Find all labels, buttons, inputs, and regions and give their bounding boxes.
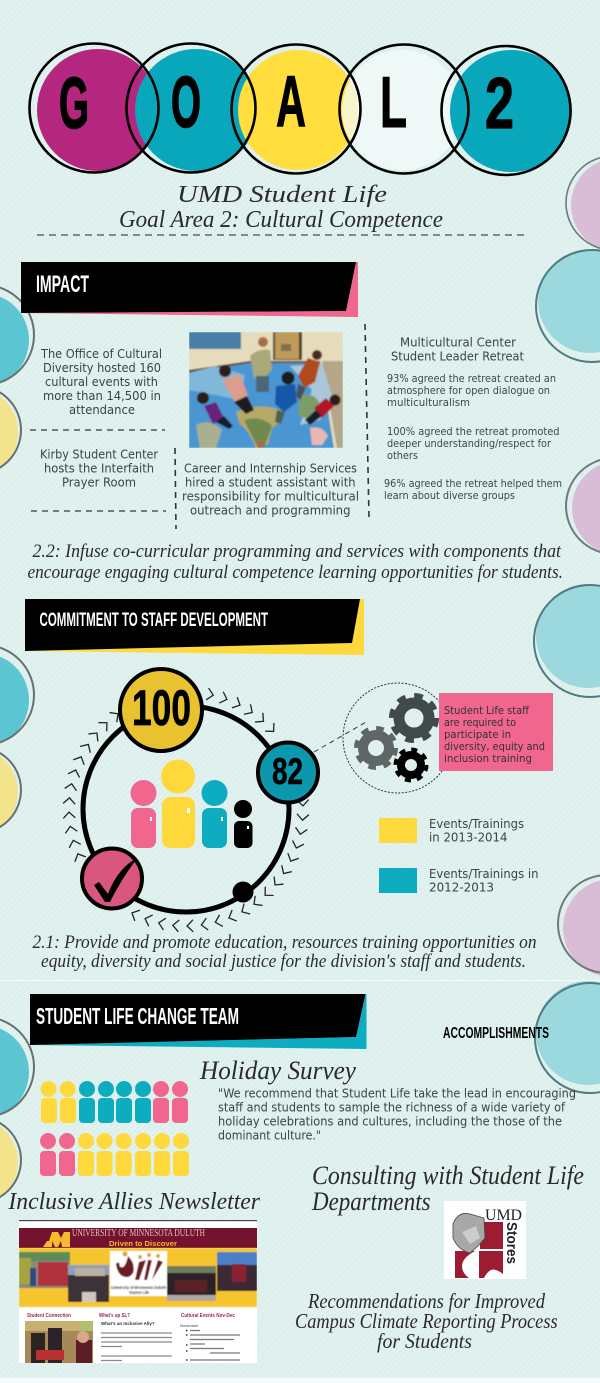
black dot <box>232 882 254 902</box>
chart: people pictogram <box>40 1081 189 1176</box>
newsletter columns: What's an Inclusive Ally? <box>101 1321 155 1326</box>
text: recommendations <box>295 1289 558 1353</box>
retreat stat 93%: multiculturalism <box>387 396 470 409</box>
text: Kirby Student Center: Kirby Student Center <box>40 446 159 462</box>
text: student leader retreat <box>384 334 562 502</box>
legend item 2012-2013: Events/Trainings in <box>429 866 538 881</box>
retreat heading <box>391 334 524 364</box>
icon: small gear <box>396 750 426 780</box>
retreat stat 93% <box>387 372 556 409</box>
panel: impact heading: IMPACT <box>36 271 89 298</box>
subtitle: Goal Area 2: Cultural Competence <box>119 207 443 233</box>
badge: 100: 100 <box>132 680 191 736</box>
panel: student life change team heading <box>30 994 366 1049</box>
text: cultural diversity events <box>40 346 162 417</box>
text: holiday survey quote: holiday celebrations and cultures, including the those of the <box>218 1114 562 1128</box>
text: Kirby Student Center: Prayer Room <box>62 474 136 490</box>
text: cultural diversity events: cultural events with <box>45 374 158 389</box>
retreat stat 93%: atmosphere for open dialogue on <box>387 384 550 397</box>
text: career and internship services: Career and Internship Services <box>184 460 357 476</box>
letter A: A <box>276 62 306 142</box>
text: recommendations: for Students <box>377 1329 472 1353</box>
people icons <box>130 760 252 848</box>
decorative side circles <box>0 156 600 1206</box>
heading: consulting with departments: Consulting with Student Life <box>312 1161 584 1190</box>
text: recommendations: Campus Climate Reporting Process <box>295 1309 558 1333</box>
text: objective 2.1 <box>32 932 536 972</box>
text: career and internship services: responsibility for multicultural <box>182 488 359 504</box>
text: objective 2.1: 2.1: Provide and promote education, resources training opportunities on <box>32 932 536 953</box>
legend item 2013-2014: Events/Trainings <box>429 816 524 831</box>
subtitle <box>119 182 443 233</box>
newsletter header: Driven to Discover <box>109 1241 177 1248</box>
photo: students standing on world map <box>189 332 343 448</box>
panel: commitment to staff development heading: COMMITMENT TO STAFF DEVELOPMENT <box>40 610 268 631</box>
newsletter columns: November <box>180 1323 199 1328</box>
text: cultural diversity events: attendance <box>69 402 135 417</box>
callout box: Student Life staff <box>444 704 529 717</box>
text: cultural diversity events: The Office of Cultural <box>40 346 162 361</box>
retreat stat 93%: 93% agreed the retreat created an <box>387 372 556 385</box>
retreat stat 100%: others <box>387 449 418 462</box>
image: newsletter preview <box>19 1220 257 1363</box>
pictogram row two <box>40 1133 189 1176</box>
text: career and internship services <box>182 460 359 518</box>
newsletter photo band: Student Life <box>129 1290 149 1295</box>
panel: commitment to staff development heading <box>25 599 364 655</box>
panel: student life change team heading: STUDENT LIFE CHANGE TEAM <box>36 1003 239 1029</box>
text: objective 2.2 <box>28 541 563 583</box>
logo: UMD Stores: UMD <box>485 1207 522 1224</box>
legend item 2012-2013: 2012-2013 <box>429 880 494 894</box>
newsletter header <box>19 1228 257 1248</box>
retreat stat 100%: 100% agreed the retreat promoted <box>387 425 560 438</box>
legend item 2012-2013 <box>379 866 538 894</box>
legend item 2013-2014 <box>379 816 524 844</box>
person: orange shirt <box>296 350 322 400</box>
circle fills <box>37 49 572 172</box>
badge: 82 <box>258 742 318 802</box>
text: cultural diversity events: more than 14,500 in <box>43 388 161 403</box>
letter L: L <box>380 63 407 143</box>
newsletter header: UNIVERSITY OF MINNESOTA DULUTH <box>72 1228 205 1239</box>
person: blue shirt <box>275 372 297 424</box>
subtitle: UMD Student Life <box>177 182 387 208</box>
retreat stat 100%: deeper understanding/respect for <box>387 437 551 450</box>
person: red shirt <box>305 394 340 425</box>
pictogram row one <box>41 1081 188 1123</box>
newsletter columns: Cultural Events Nov-Dec <box>181 1313 235 1319</box>
legend item 2013-2014: in 2013-2014 <box>429 830 508 844</box>
text: objective 2.2: 2.2: Infuse co-curricular programming and services with components that <box>32 541 562 562</box>
legend <box>379 816 538 894</box>
badge: check mark <box>82 848 142 908</box>
text: holiday survey quote: staff and students to sample the richness of a wide variety of <box>218 1100 566 1114</box>
panel: impact heading <box>21 262 358 317</box>
text: career and internship services: hired a student assistant with <box>185 474 356 490</box>
heading: holiday survey: Holiday Survey <box>199 1056 356 1085</box>
person: standing man <box>250 337 272 392</box>
text: Kirby Student Center: hosts the Interfaith <box>44 460 154 476</box>
title: GOAL 2 circles <box>30 44 572 175</box>
heading: consulting with departments: Departments <box>311 1187 430 1216</box>
retreat stat 96%: 96% agreed the retreat helped them <box>384 477 562 490</box>
logo: UMD Stores: Stores <box>503 1222 520 1264</box>
text: holiday survey quote <box>218 1086 576 1142</box>
callout box: diversity, equity and <box>444 740 545 753</box>
text: objective 2.2: encourage engaging cultural competence learning opportunities for students. <box>28 562 563 583</box>
retreat stat 100% <box>387 425 560 462</box>
text: career and internship services: outreach and programming <box>190 502 350 518</box>
icon: large gear <box>392 696 436 740</box>
newsletter columns: What's up SL? <box>99 1313 131 1319</box>
newsletter photo band <box>19 1248 257 1307</box>
icon: medium gear <box>357 729 395 767</box>
callout box: participate in <box>444 728 511 741</box>
text: holiday survey quote: dominant culture." <box>218 1128 321 1142</box>
badge: 82: 82 <box>272 751 303 792</box>
callout: gears and diversity training <box>314 683 553 793</box>
callout box: are required to <box>444 716 516 729</box>
callout box: inclusion training <box>444 752 532 765</box>
chart: staff development ring <box>63 669 318 932</box>
newsletter columns: Student Connection <box>27 1313 71 1319</box>
retreat heading: Student Leader Retreat <box>391 348 524 364</box>
retreat stat 96% <box>384 477 562 502</box>
heading: inclusive allies newsletter: Inclusive Allies Newsletter <box>7 1189 261 1215</box>
circle outlines <box>30 44 570 175</box>
person: striped shirt <box>219 365 254 414</box>
letter G: G <box>59 64 89 144</box>
person: purple shirt <box>197 392 233 429</box>
letter O: O <box>171 63 201 143</box>
retreat heading: Multicultural Center <box>400 334 517 350</box>
callout box <box>439 693 553 771</box>
heading: consulting with departments <box>311 1161 584 1216</box>
text: cultural diversity events: Diversity hosted 160 <box>43 360 161 375</box>
text: Kirby Student Center <box>40 446 159 490</box>
text: objective 2.1: equity, diversity and social justice for the division's staff and students. <box>41 951 526 972</box>
number 2: 2 <box>485 64 514 144</box>
chevron arrows around ring <box>63 688 309 932</box>
logo: UMD Stores <box>444 1201 526 1279</box>
text: recommendations: Recommendations for Improved <box>307 1289 545 1313</box>
newsletter columns <box>25 1313 240 1363</box>
retreat stat 96%: learn about diverse groups <box>384 489 515 502</box>
newsletter photo band: University of Minnesota Duluth <box>111 1285 166 1290</box>
badge: 100 <box>120 669 202 751</box>
